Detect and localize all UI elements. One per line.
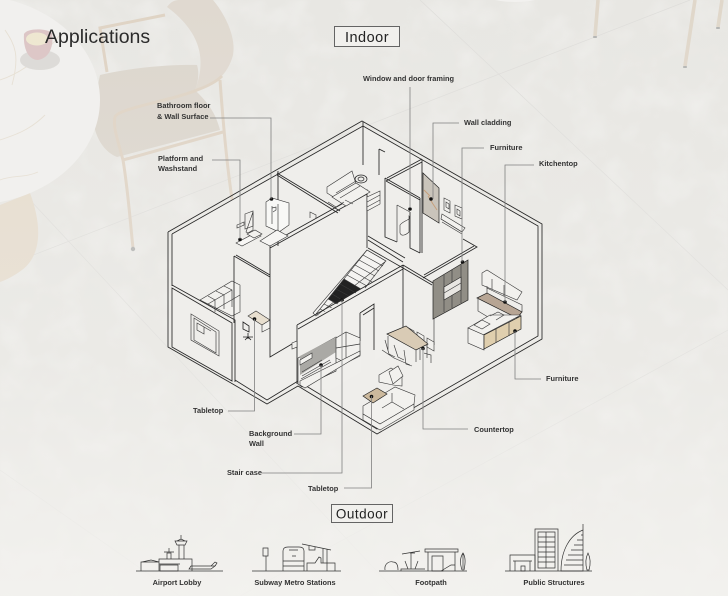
kitchen	[468, 270, 522, 350]
label: Kitchentop: Kitchentop	[539, 159, 578, 168]
outdoor: Airport Lobby	[136, 535, 223, 587]
outdoor: Footpath: Footpath	[415, 578, 447, 587]
label: Tabletop bottom	[308, 396, 372, 493]
outdoor: Public Structures: Public Structures	[523, 578, 585, 587]
label: Kitchentop	[505, 159, 578, 302]
loft slab	[368, 236, 477, 278]
icon: public buildings	[505, 524, 592, 571]
icon: footpath	[379, 549, 467, 571]
outdoor: Subway Metro Stations: Subway Metro Stations	[254, 578, 336, 587]
label: Furniture lower: Furniture	[546, 374, 578, 383]
label: Furniture upper	[462, 143, 522, 262]
heading: Outdoor: Outdoor	[336, 506, 388, 522]
staircase	[313, 250, 386, 316]
label: Platform and Washstand	[158, 154, 240, 239]
label: Platform and Washstand: Platform and	[158, 154, 204, 163]
label: Countertop	[423, 348, 514, 434]
label: Tabletop left: Tabletop	[193, 406, 224, 415]
label: Background Wall: Wall	[249, 439, 264, 448]
bedroom sofa	[327, 171, 380, 211]
icon: toilet	[400, 216, 410, 235]
label: Tabletop bottom: Tabletop	[308, 484, 339, 493]
icon: desk chair	[243, 322, 253, 340]
title: Applications	[45, 26, 150, 48]
label: Wall cladding	[433, 118, 512, 199]
label: Window and door framing: Window and door framing	[363, 74, 455, 83]
bathroom washstand	[236, 211, 262, 246]
label: Tabletop left	[193, 319, 254, 415]
label: Bathroom floor and wall surface: & Wall Surface	[157, 112, 208, 121]
heading: Indoor	[334, 26, 400, 46]
icon: subway	[252, 544, 341, 571]
label: Platform and Washstand: Washstand	[158, 164, 198, 173]
front living room wall	[297, 248, 434, 390]
outdoor: Footpath	[379, 549, 467, 587]
wall frames and shelf	[441, 198, 465, 234]
label: Furniture lower	[515, 331, 578, 383]
label: Furniture upper: Furniture	[490, 143, 522, 152]
label: Stair case: Stair case	[227, 468, 262, 477]
outdoor: Subway Metro Stations	[252, 544, 341, 587]
label: Bathroom floor and wall surface: Bathroom floor	[157, 101, 210, 110]
label: Countertop: Countertop	[474, 425, 514, 434]
sofa and coffee table	[363, 387, 415, 430]
label: Background Wall	[249, 365, 321, 448]
dark tall wardrobe	[433, 260, 468, 319]
study shelves and desk	[200, 281, 270, 340]
isometric floor plan	[168, 121, 542, 434]
TV background wall cabinet	[292, 332, 360, 388]
lounge armchair	[379, 366, 403, 386]
wall cladding marble panel	[423, 173, 439, 223]
heading: Indoor: Indoor	[345, 30, 389, 46]
dining table and chairs	[382, 326, 434, 366]
bathroom room walls	[277, 171, 340, 246]
label: Window and door framing	[363, 74, 455, 208]
label: Wall cladding: Wall cladding	[464, 118, 512, 127]
outer walls	[168, 121, 542, 434]
icon: airport	[136, 535, 223, 571]
label: Stair case	[227, 300, 342, 477]
label: Background Wall: Background	[249, 429, 293, 438]
outdoor: Public Structures	[505, 524, 592, 587]
photo: table and chair	[0, 0, 237, 282]
interior cross wall	[234, 190, 367, 357]
upper right room walls and door	[379, 149, 422, 253]
bathroom shower unit	[260, 197, 289, 246]
outdoor: Airport Lobby: Airport Lobby	[153, 578, 202, 587]
label: Bathroom floor and wall surface	[157, 101, 271, 199]
front-left wall with window	[172, 285, 235, 382]
photo: chair legs top right	[595, 0, 722, 68]
